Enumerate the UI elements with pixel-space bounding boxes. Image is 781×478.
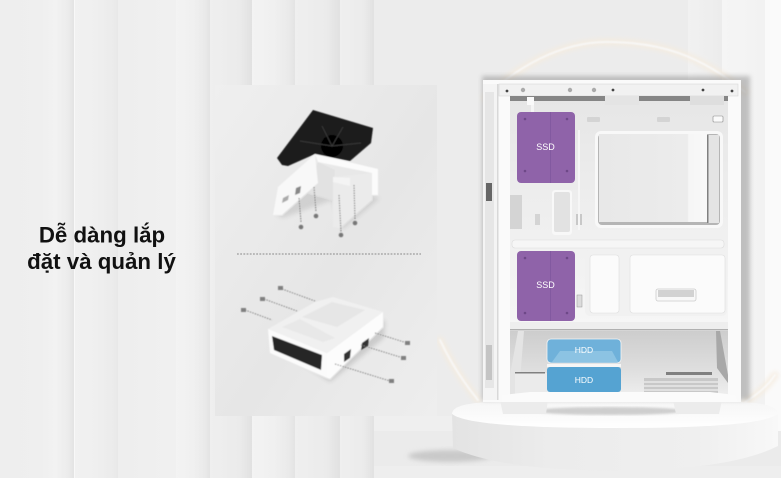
SSD tray 1: SSD — [536, 142, 555, 152]
motherboard cutout — [595, 131, 723, 228]
SSD tray 2 — [517, 251, 575, 321]
heading: Dễ dàng lắp — [39, 222, 165, 248]
screws — [245, 289, 404, 381]
HDD bay 1 — [547, 339, 621, 363]
bottom rail — [502, 392, 738, 402]
horizontal rail — [512, 240, 724, 248]
HDD bay 1: HDD — [575, 345, 593, 355]
glowing ring behind the case — [440, 42, 775, 402]
SSD tray 1 — [517, 112, 575, 183]
back plate — [510, 96, 728, 328]
top rail — [499, 84, 738, 96]
heading — [27, 222, 176, 274]
lower plates — [577, 250, 727, 316]
HDD bay 2: HDD — [575, 375, 593, 385]
case frame — [483, 80, 741, 402]
front panel edge — [483, 84, 498, 400]
PC case — [482, 76, 750, 414]
screws — [299, 185, 355, 232]
illustration: fan and bracket assembly — [273, 110, 380, 237]
heading: đặt và quản lý — [27, 249, 176, 274]
SSD tray 2: SSD — [536, 280, 555, 290]
panel: installation steps — [215, 85, 437, 416]
slots and small cutouts — [510, 116, 723, 235]
shroud ledge — [510, 322, 728, 330]
case feet — [500, 400, 722, 414]
illustration: drive cage with side screws — [241, 286, 410, 383]
HDD bay 2 — [547, 364, 621, 392]
divider dotted line — [237, 253, 421, 255]
PSU chamber — [510, 331, 728, 395]
case shadow — [482, 76, 750, 400]
podium — [408, 402, 778, 471]
